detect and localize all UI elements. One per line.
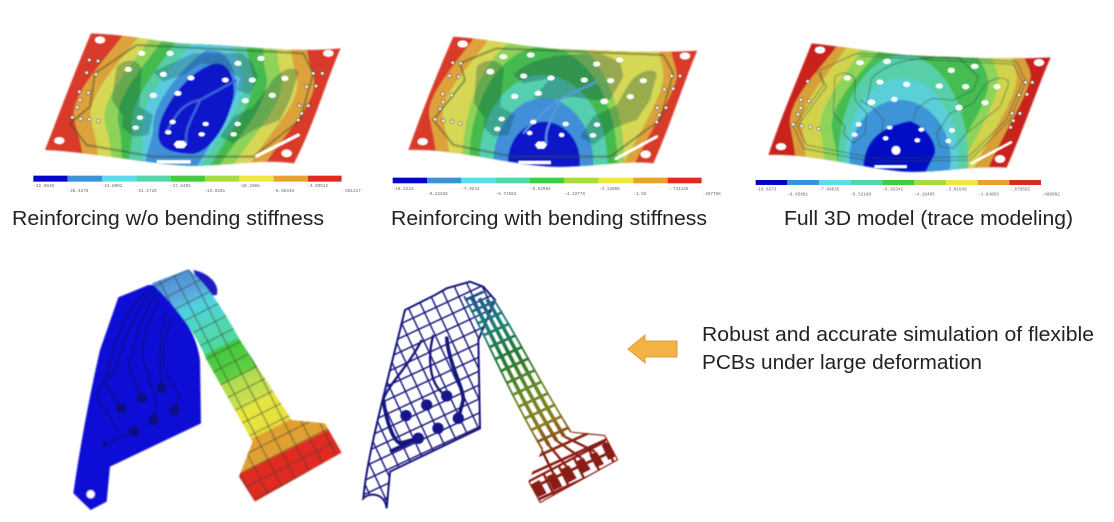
legend: colour scale 2 (393, 178, 721, 197)
caption 3: Full 3D model (trace modeling) (784, 208, 1073, 230)
legend: colour scale 2: -5.52664 (530, 187, 551, 192)
wireframe rigid section (360, 277, 500, 513)
wireframe gradient strip (462, 290, 619, 504)
panel: reinforcing with bending stiffness (392, 36, 721, 229)
legend: colour scale 3: -5.35342 (882, 188, 904, 193)
mounting holes (54, 36, 334, 164)
contour plot: full 3D trace model (768, 42, 1052, 174)
legend: colour scale 1: -3.03612 (307, 184, 328, 189)
legend: colour scale 2: -3.12888 (599, 187, 620, 192)
legend: colour scale 3: -3.01649 (946, 188, 967, 193)
description text: PCBs under large deformation (702, 352, 982, 374)
legend: colour scale 1: -13.9181 (204, 189, 225, 194)
red pads (530, 442, 615, 497)
legend: colour scale 3: .488902 (1042, 193, 1060, 198)
panel: full 3D model (756, 42, 1072, 229)
legend: colour scale 2: -1.93 (633, 192, 647, 197)
wireframe flexible PCB model (361, 280, 619, 510)
legend: colour scale 2: -9.12328 (427, 192, 448, 197)
legend: colour scale 1: -17.5455 (170, 184, 191, 189)
description text (702, 324, 1094, 374)
colored strip with mesh (140, 267, 347, 507)
legend: colour scale 3: -10.0273 (756, 188, 777, 193)
legend: colour scale 3: -4.18495 (914, 193, 935, 198)
legend: colour scale 3 (756, 180, 1060, 198)
legend: colour scale 1: -21.1728 (136, 189, 157, 194)
legend: colour scale 2: -10.3222 (393, 187, 414, 192)
legend: colour scale 2: -4.32776 (564, 192, 585, 197)
legend: colour scale 1 (33, 176, 361, 194)
legend: colour scale 3: -7.69035 (819, 188, 840, 193)
blue rigid section (73, 285, 201, 510)
contour plot: deformation without bending stiffness (44, 32, 342, 167)
legend: colour scale 2: .467765 (703, 192, 721, 197)
legend: colour scale 2: -6.72552 (496, 192, 517, 197)
legend: colour scale 1: -32.0648 (33, 184, 55, 189)
legend: colour scale 3: -8.85881 (787, 193, 809, 198)
solid flexible PCB model (73, 267, 347, 510)
legend: colour scale 1: -28.4276 (68, 189, 89, 194)
caption 2: Reinforcing with bending stiffness (391, 208, 707, 230)
caption 1: Reinforcing w/o bending stiffness (12, 208, 324, 230)
legend: colour scale 1: -6.66346 (273, 189, 294, 194)
legend: colour scale 2: -.731125 (668, 187, 689, 192)
back lobe (193, 270, 217, 297)
legend: colour scale 1: -24.8002 (102, 184, 123, 189)
legend: colour scale 3: -6.52188 (850, 193, 872, 198)
contour plot: deformation with bending stiffness (408, 36, 698, 168)
legend: colour scale 1: -10.2908 (239, 184, 260, 189)
legend: colour scale 3: -.679562 (1009, 188, 1030, 193)
arrow pointing to models (628, 335, 677, 363)
description text: Robust and accurate simulation of flexible (702, 324, 1094, 346)
mounting holes (776, 46, 1044, 168)
legend: colour scale 1: .591217 (343, 189, 361, 194)
legend: colour scale 3: -1.84803 (978, 193, 999, 198)
panel: reinforcing without bending stiffness (12, 27, 361, 230)
mounting holes (417, 40, 690, 164)
legend: colour scale 2: -7.9244 (461, 187, 480, 192)
